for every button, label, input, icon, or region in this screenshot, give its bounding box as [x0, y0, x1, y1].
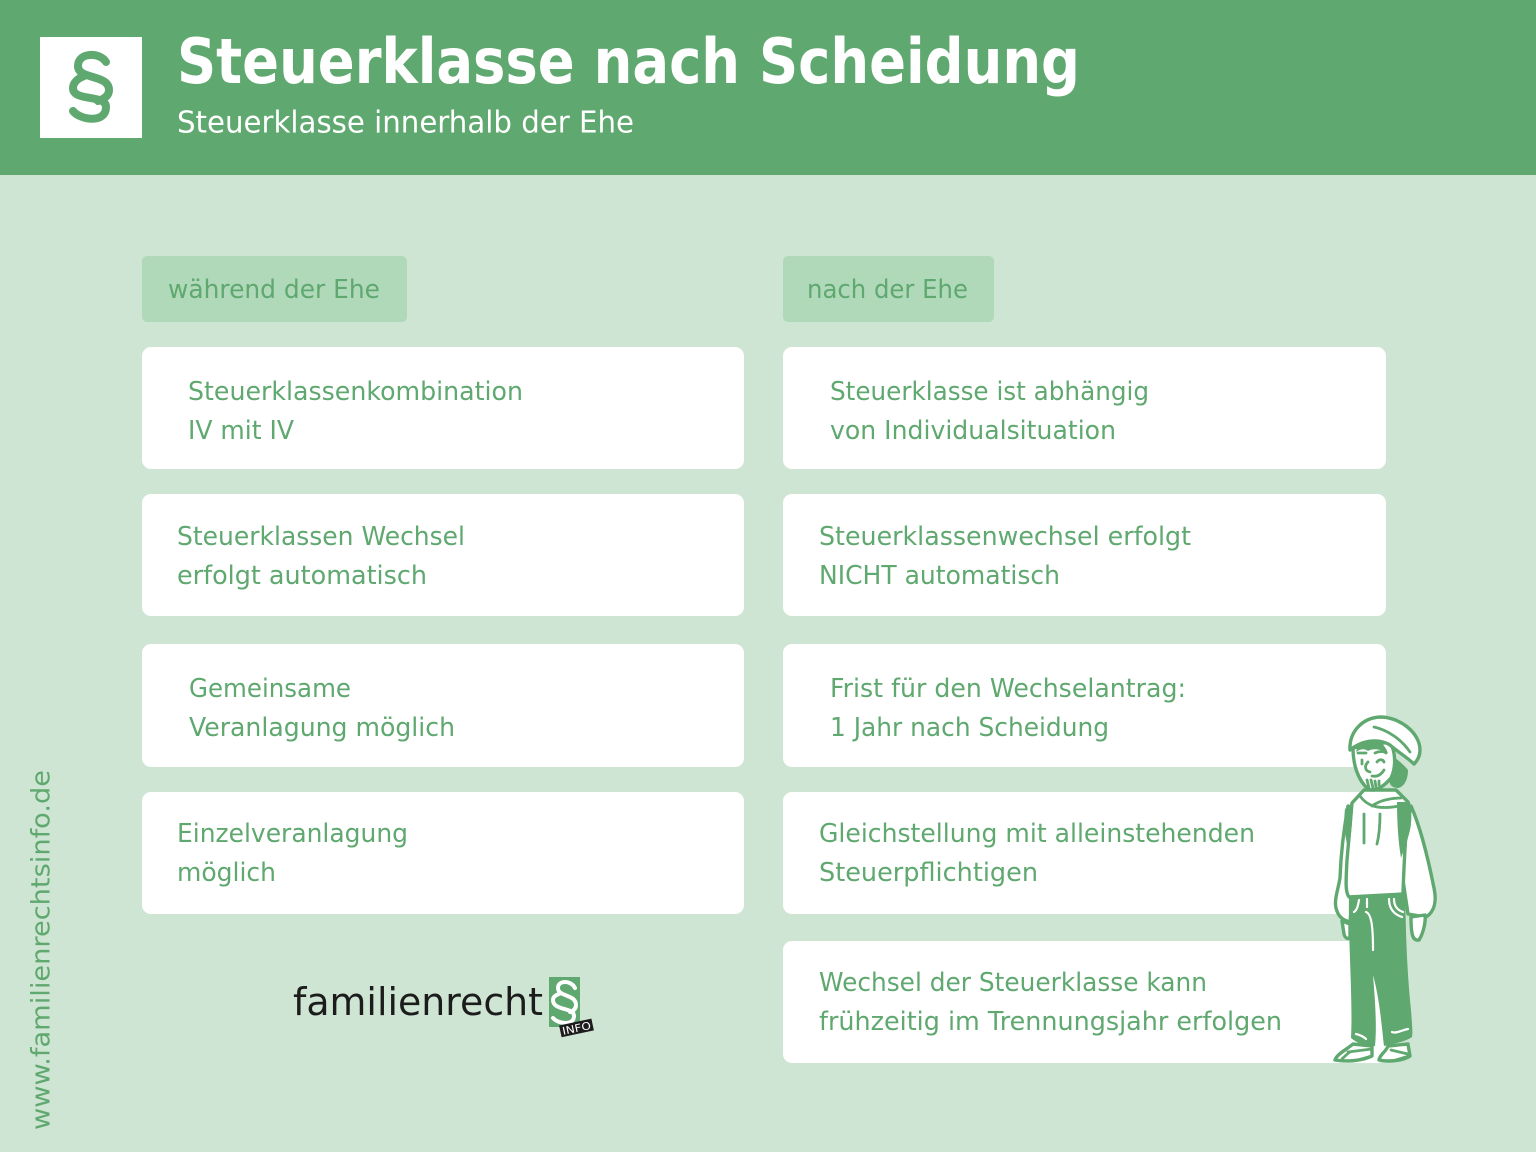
card: Einzelveranlagung: Einzelveranlagung	[177, 819, 408, 849]
card: Wechsel Trennungsjahr: Wechsel der Steuerklasse kann	[819, 968, 1207, 998]
right sleeve	[1400, 806, 1435, 917]
card: Individualsituation: Steuerklasse ist abhängig	[830, 377, 1149, 407]
face	[1353, 742, 1395, 790]
turban	[1350, 717, 1420, 764]
illustration: person with turban	[1335, 717, 1435, 1061]
card: Frist: Frist für den Wechselantrag:	[830, 674, 1186, 704]
card: Frist: 1 Jahr nach Scheidung	[830, 713, 1109, 743]
column heading: während der Ehe: während der Ehe	[168, 275, 380, 305]
trouser highlights	[1354, 899, 1408, 1039]
eyes and smile	[1358, 752, 1386, 776]
card: Gleichstellung: Steuerpflichtigen	[819, 858, 1038, 888]
card: Steuerklassen Wechsel	[142, 494, 744, 616]
website url: www.familienrechtsinfo.de	[26, 770, 56, 1130]
column heading: nach der Ehe	[783, 256, 994, 322]
icon: paragraph symbol	[40, 37, 142, 138]
left hand	[1342, 921, 1350, 938]
beard	[1367, 780, 1379, 788]
logo: familienrecht info: familienrecht	[293, 980, 543, 1024]
card: Einzelveranlagung	[142, 792, 744, 914]
card: Individualsituation: von Individualsituation	[830, 416, 1116, 446]
backpack strap left	[1344, 802, 1353, 852]
card: Steuerklassenwechsel	[783, 494, 1386, 616]
hood lines	[1364, 814, 1380, 844]
card: Steuerklassenkombination: Steuerklassenkombination	[188, 377, 523, 407]
card: Gemeinsame Veranlagung: Gemeinsame	[189, 674, 351, 704]
card: Steuerklassen Wechsel: erfolgt automatisch	[177, 561, 427, 591]
card: Frist	[783, 644, 1386, 767]
card: Individualsituation	[783, 347, 1386, 469]
shoe left	[1335, 1044, 1372, 1061]
hoodie body	[1346, 790, 1408, 897]
shoe right	[1379, 1044, 1410, 1061]
trousers	[1349, 894, 1412, 1046]
header banner	[0, 0, 1536, 175]
card: Wechsel Trennungsjahr	[783, 941, 1386, 1063]
card: Gemeinsame Veranlagung: Veranlagung möglich	[189, 713, 455, 743]
card: Steuerklassen Wechsel: Steuerklassen Wechsel	[177, 522, 465, 552]
shoe details	[1342, 1049, 1409, 1060]
card: Steuerklassenkombination: IV mit IV	[188, 416, 295, 446]
hair behind neck	[1389, 757, 1408, 788]
card: Steuerklassenwechsel: Steuerklassenwechsel erfolgt	[819, 522, 1191, 552]
logo: familienrecht info	[293, 977, 594, 1038]
card: Steuerklassenkombination	[142, 347, 744, 469]
title: Steuerklasse nach Scheidung	[177, 25, 1080, 98]
card: Gleichstellung: Gleichstellung mit alleinstehenden	[819, 819, 1255, 849]
hair fringe	[1356, 738, 1388, 753]
column heading: nach der Ehe: nach der Ehe	[807, 275, 968, 305]
card: Wechsel Trennungsjahr: frühzeitig im Trennungsjahr erfolgen	[819, 1007, 1282, 1037]
left sleeve	[1335, 806, 1354, 922]
card: Gemeinsame Veranlagung	[142, 644, 744, 767]
card: Gleichstellung	[783, 792, 1386, 914]
card: Steuerklassenwechsel: NICHT automatisch	[819, 561, 1060, 591]
card: Einzelveranlagung: möglich	[177, 858, 276, 888]
right hand	[1411, 915, 1425, 940]
column heading: während der Ehe	[142, 256, 407, 322]
logo: familienrecht info: INFO	[561, 1020, 592, 1038]
subtitle: Steuerklasse innerhalb der Ehe	[177, 106, 634, 140]
backpack strap right	[1397, 802, 1411, 858]
